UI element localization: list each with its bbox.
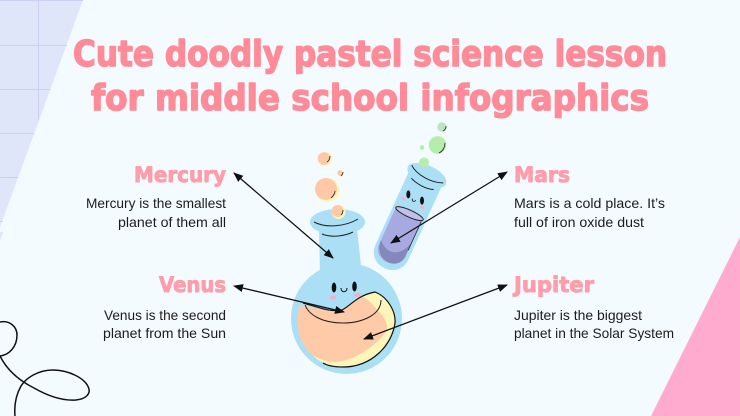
Jupiter block: Jupiter	[512, 273, 595, 297]
test tube	[366, 158, 450, 277]
green bubbles	[419, 122, 447, 168]
Venus block: planet from the Sun	[103, 325, 226, 341]
arrow: Mars	[391, 172, 507, 243]
Mercury block: Mercury is the smallest	[86, 195, 226, 211]
flask illustration	[291, 122, 450, 374]
title	[73, 34, 667, 119]
title: for middle school infographics	[91, 78, 649, 119]
Mercury block: Mercury	[134, 163, 226, 187]
arrow: Venus	[234, 286, 344, 312]
arrow: Mercury	[234, 173, 333, 258]
squiggle doodle	[0, 322, 89, 416]
Jupiter block: Jupiter is the biggest	[514, 307, 642, 323]
orange bubbles	[315, 152, 346, 219]
Venus block: Venus	[159, 273, 226, 297]
Mars block: Mars is a cold place. It’s	[514, 195, 665, 211]
Venus block	[103, 273, 226, 341]
title: Cute doodly pastel science lesson	[73, 34, 667, 75]
Mars block	[514, 163, 665, 230]
pink corner triangle	[651, 237, 740, 416]
flask liquid	[298, 292, 395, 367]
arrow: Jupiter	[364, 285, 507, 339]
flask body	[291, 209, 402, 374]
grid paper panel	[0, 0, 83, 241]
Mars block: full of iron oxide dust	[514, 214, 644, 230]
flask face	[330, 282, 361, 300]
Mercury block: planet of them all	[118, 214, 226, 230]
Mercury block	[86, 163, 226, 230]
Venus block: Venus is the second	[104, 307, 226, 323]
Jupiter block	[512, 273, 674, 341]
Jupiter block: planet in the Solar System	[514, 325, 674, 341]
Mars block: Mars	[514, 163, 570, 187]
